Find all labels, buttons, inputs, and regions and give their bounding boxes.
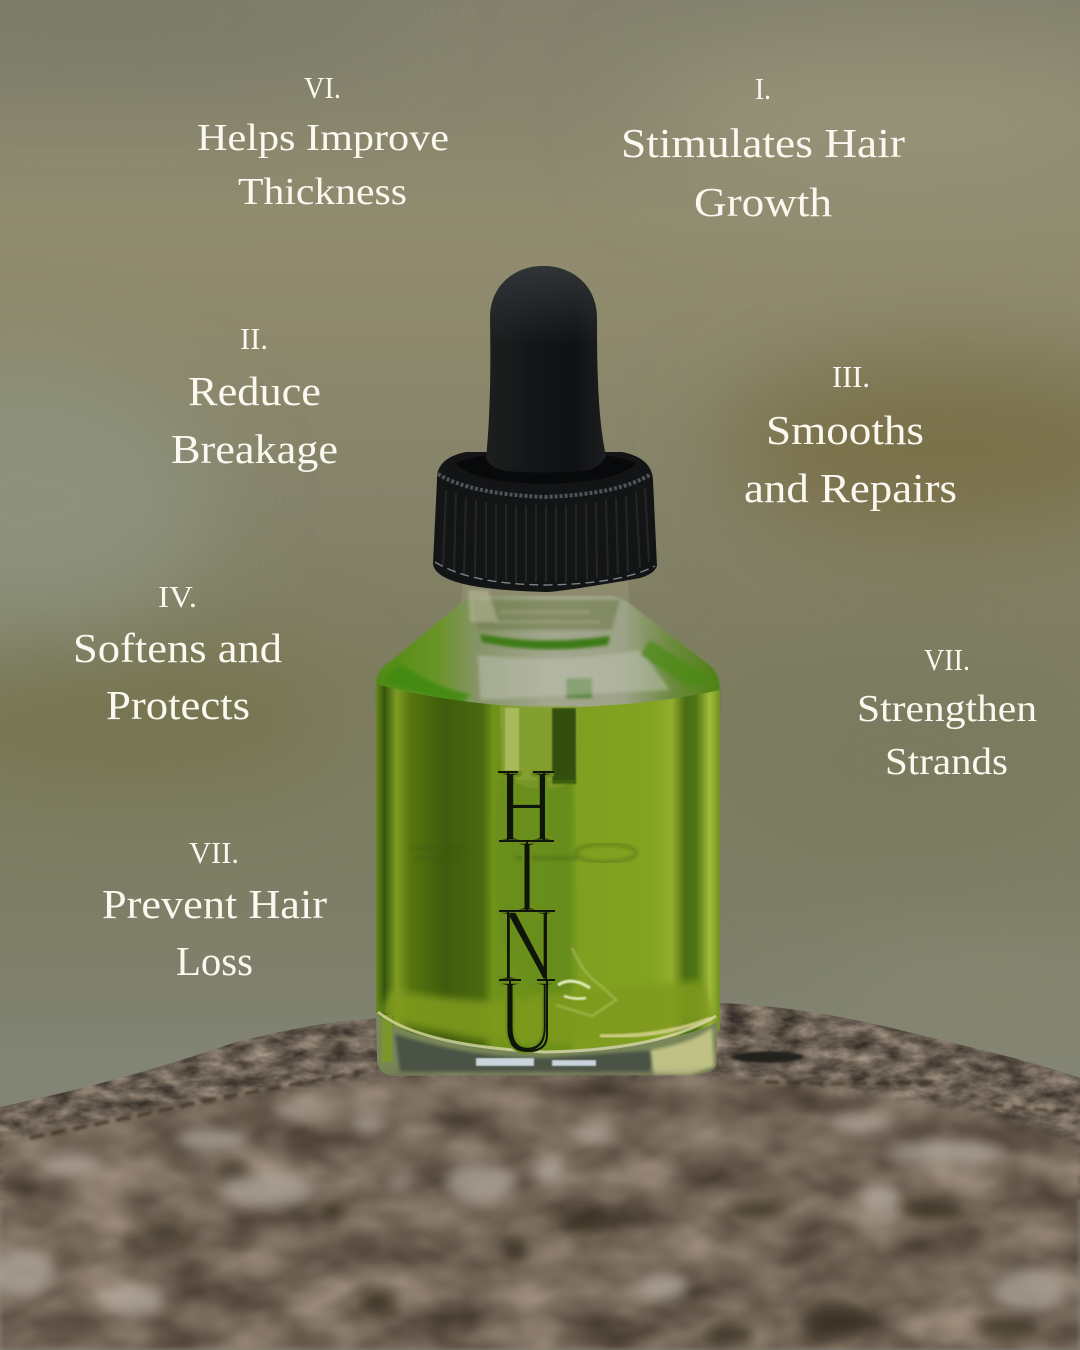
benefit VI bbox=[197, 70, 449, 213]
benefit I: Growth bbox=[694, 179, 832, 225]
benefit VII right: VII. bbox=[924, 642, 970, 677]
lower bright oil band bbox=[380, 980, 716, 1044]
dropper bottle bbox=[376, 266, 720, 1076]
back rock surface bbox=[0, 1000, 1080, 1200]
benefit III: Smooths bbox=[766, 407, 924, 453]
benefit VII left bbox=[102, 835, 327, 984]
benefit VI: Thickness bbox=[238, 171, 407, 213]
benefit II: II. bbox=[240, 321, 268, 356]
foreground blurred rock bbox=[0, 1050, 1080, 1350]
dropper cap bbox=[433, 452, 657, 592]
benefit II bbox=[171, 321, 338, 472]
dropper pipette bbox=[496, 706, 578, 995]
benefit III bbox=[744, 359, 957, 511]
benefit VII left: Loss bbox=[176, 938, 253, 984]
benefit IV bbox=[73, 579, 282, 728]
benefit VI: Helps Improve bbox=[197, 117, 449, 159]
benefit I: I. bbox=[755, 71, 771, 106]
HINU logo: U bbox=[498, 957, 555, 1074]
glass base bbox=[376, 1012, 718, 1076]
dark rock patches bbox=[121, 1160, 1037, 1347]
glass neck bbox=[460, 582, 630, 612]
benefit III: and Repairs bbox=[744, 465, 957, 511]
faint back label reflection bbox=[410, 844, 636, 862]
rock ridge cracks bbox=[30, 1072, 1078, 1138]
benefit VII right: Strands bbox=[885, 741, 1008, 783]
benefit IV: Protects bbox=[106, 682, 250, 728]
benefit VII left: VII. bbox=[189, 835, 239, 870]
benefit I bbox=[621, 71, 905, 225]
pipette tip bubbles bbox=[556, 948, 616, 1016]
HINU logo: H bbox=[498, 747, 555, 864]
benefit VII left: Prevent Hair bbox=[102, 881, 327, 927]
benefit III: III. bbox=[832, 359, 870, 394]
oil liquid bbox=[376, 684, 720, 1052]
HINU logo bbox=[498, 747, 555, 1074]
benefit VI: VI. bbox=[304, 70, 341, 105]
shoulder reflections bbox=[382, 590, 712, 706]
benefit VII right: Strengthen bbox=[857, 688, 1037, 730]
benefit II: Breakage bbox=[171, 426, 338, 472]
light rock patches bbox=[0, 1103, 1066, 1316]
benefit II: Reduce bbox=[188, 368, 321, 414]
benefit IV: IV. bbox=[158, 579, 197, 614]
bottle shoulder glass bbox=[376, 596, 720, 712]
rubber bulb bbox=[486, 266, 606, 472]
benefit I: Stimulates Hair bbox=[621, 120, 905, 166]
HINU logo: N bbox=[498, 886, 555, 1003]
benefit VII right bbox=[857, 642, 1037, 783]
HINU logo: I bbox=[514, 817, 540, 934]
benefit IV: Softens and bbox=[73, 625, 282, 671]
